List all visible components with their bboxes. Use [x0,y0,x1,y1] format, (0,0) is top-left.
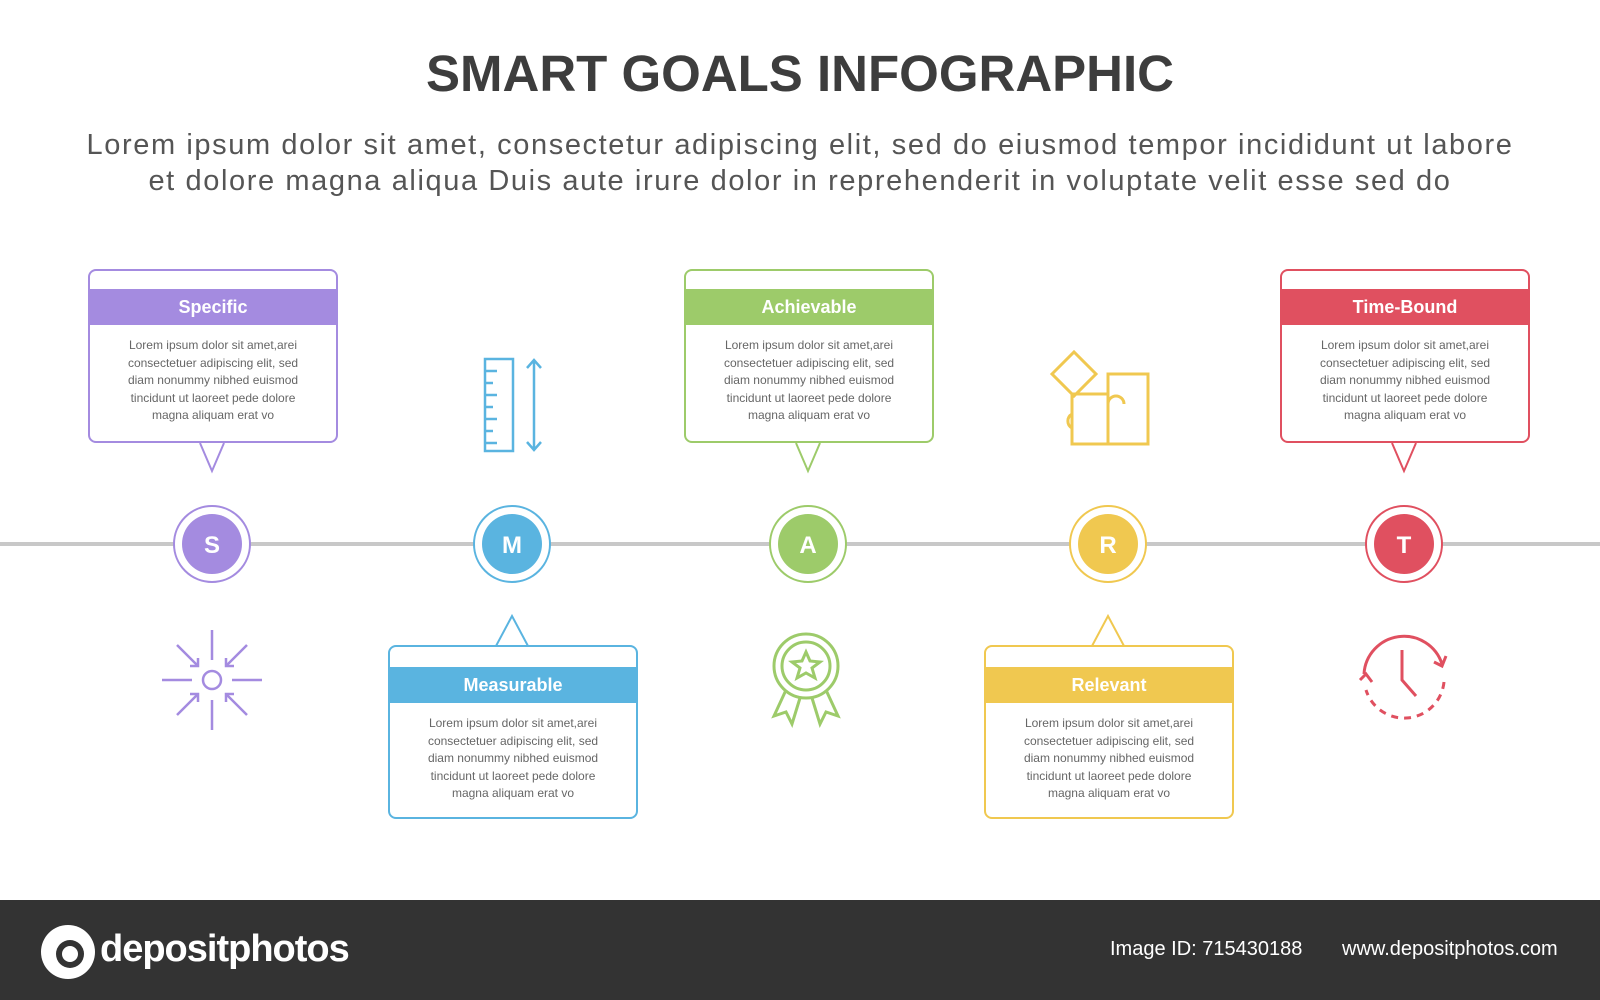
text: Lorem ipsum dolor sit amet,arei consectetuer adipiscing elit, sed diam nonummy nibhed euismod tincidunt ut laoreet pede dolore magna aliquam erat vo [428,716,598,800]
subtitle: et dolore magna aliqua Duis aute irure dolor in reprehenderit in voluptate velit esse sed do [148,165,1452,197]
circle A [769,505,847,583]
heading: Relevant [1071,675,1147,695]
circle S: S [204,532,220,559]
subtitle [86,129,1514,197]
text: Lorem ipsum dolor sit amet,arei consectetuer adipiscing elit, sed diam nonummy nibhed euismod tincidunt ut laoreet pede dolore magna aliquam erat vo [1024,716,1194,800]
icon: ruler [484,358,542,452]
heading: Measurable [463,675,563,695]
url: www.depositphotos.com [1342,938,1558,960]
text: Lorem ipsum dolor sit amet,arei consectetuer adipiscing elit, sed diam nonummy nibhed euismod tincidunt ut laoreet pede dolore magna aliquam erat vo [1320,338,1490,422]
heading: Achievable [761,297,857,317]
panel: measurable [388,645,638,819]
logo: depositphotos [100,928,349,970]
subtitle: Lorem ipsum dolor sit amet, consectetur adipiscing elit, sed do eiusmod tempor incididunt ut labore [86,129,1514,161]
circle A: A [799,532,817,559]
circle R: R [1099,532,1117,559]
circle T: T [1397,532,1412,559]
footer [0,900,1600,1000]
icon: target arrows [162,630,262,730]
icon: clock [1359,634,1448,720]
pointers [200,443,1416,646]
heading [986,667,1232,703]
heading [1282,289,1528,325]
icon: award [771,632,841,728]
logo [41,925,349,979]
circle S [173,505,251,583]
icon: puzzle [1050,350,1150,446]
circle M [473,505,551,583]
heading: Time-Bound [1353,297,1457,317]
panel: relevant [984,645,1234,819]
circle M: M [502,532,522,559]
heading [390,667,636,703]
circle T [1365,505,1443,583]
image id: Image ID: 715430188 [1110,938,1302,960]
circle R [1069,505,1147,583]
text: Lorem ipsum dolor sit amet,arei consectetuer adipiscing elit, sed diam nonummy nibhed euismod tincidunt ut laoreet pede dolore magna aliquam erat vo [128,338,298,422]
title: SMART GOALS INFOGRAPHIC [426,45,1174,102]
heading: Specific [178,297,248,317]
panel: specific [88,269,338,443]
text: Lorem ipsum dolor sit amet,arei consectetuer adipiscing elit, sed diam nonummy nibhed euismod tincidunt ut laoreet pede dolore magna aliquam erat vo [724,338,894,422]
panel: time-bound [1280,269,1530,443]
panel: achievable [684,269,934,443]
heading [90,289,336,325]
heading [686,289,932,325]
